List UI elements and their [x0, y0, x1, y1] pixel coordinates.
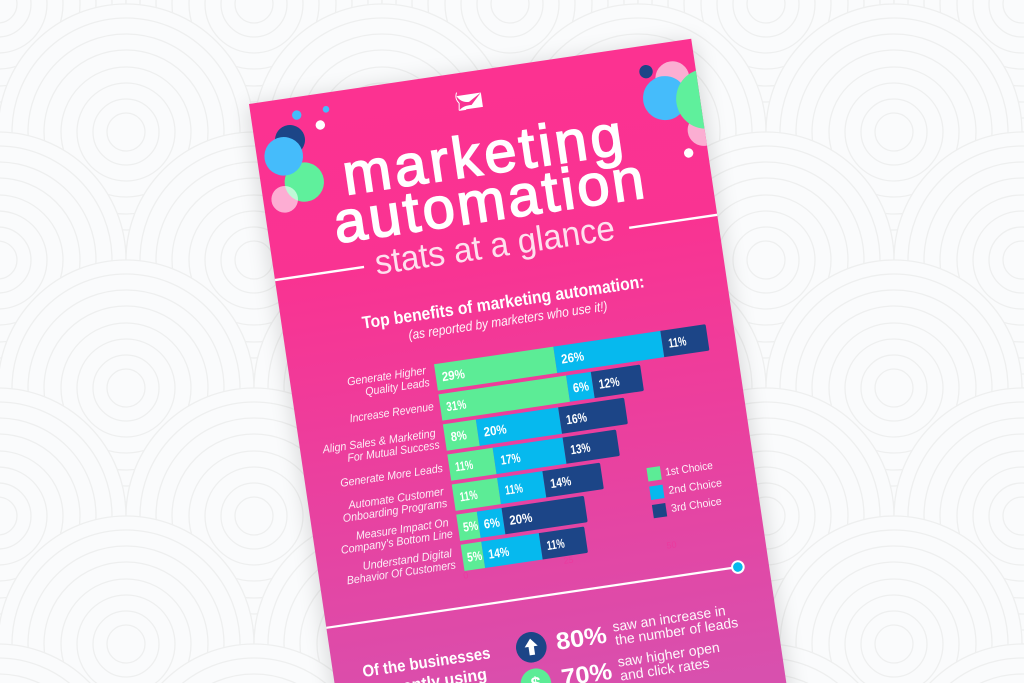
- bar: Generate Higher Quality Leads: 11%: [667, 333, 688, 351]
- section divider with dot: [326, 560, 744, 634]
- bar: Measure Impact: 6%: [483, 514, 501, 532]
- bar: Automate Customer Onboarding: 14%: [549, 473, 573, 491]
- icon: up arrow: [514, 630, 549, 665]
- card background: [249, 39, 823, 683]
- stat: 80 percent leads: saw an increase in: [611, 602, 727, 635]
- bar: Understand Digital Behavior: 11%: [546, 536, 566, 553]
- bar: Generate Higher Quality Leads: 26%: [560, 348, 585, 367]
- stat: 70 percent open rates: saw higher open: [616, 639, 721, 670]
- chart legend: 1st Choice: [664, 460, 714, 479]
- chart category labels: [312, 365, 458, 588]
- bar: Increase Revenue: 31%: [445, 396, 468, 414]
- chart legend: 3rd Choice: [670, 496, 723, 515]
- text: of the businesses currently using: Of the businesses: [361, 644, 492, 681]
- chart category labels: Generate Higher: [346, 365, 428, 389]
- stat: 80 percent leads: [514, 601, 739, 665]
- bar: Automate Customer Onboarding: 11%: [504, 480, 524, 498]
- chart subheading: (as reported by marketers who use it!): [407, 298, 608, 343]
- chart category labels: Automate Customer: [347, 486, 446, 512]
- chart category labels: Generate More Leads: [340, 463, 444, 490]
- bar: Generate Higher Quality Leads: 29%: [441, 366, 466, 384]
- stat: 70 percent open rates: and click rates: [619, 655, 710, 683]
- stat: 80 percent leads: 80%: [554, 622, 609, 656]
- bar: Understand Digital Behavior: [461, 526, 588, 571]
- subtitle rule: right: [629, 215, 717, 228]
- chart category labels: Quality Leads: [365, 377, 431, 398]
- bar: Align Sales and Marketing: 16%: [565, 409, 588, 427]
- chart legend: [646, 458, 726, 518]
- chart category labels: Measure Impact On: [355, 517, 449, 543]
- bar: Align Sales and Marketing: 20%: [483, 421, 508, 439]
- subtitle: stats at a glance: [372, 209, 617, 283]
- bar: Automate Customer Onboarding: [452, 463, 604, 511]
- icon: logo envelope: [455, 89, 483, 111]
- chart category labels: For Mutual Success: [347, 439, 441, 465]
- bar: Measure Impact: [456, 496, 588, 541]
- bar: Generate More Leads: [447, 430, 620, 481]
- bar: Understand Digital Behavior: 5%: [466, 548, 483, 565]
- title: marketing: [338, 102, 627, 208]
- title: automation: [329, 146, 648, 256]
- bar: Generate More Leads: 13%: [569, 440, 592, 457]
- stat: 70 percent open rates: [518, 639, 723, 683]
- decorative bubbles: top right: [639, 61, 707, 158]
- card shadow: [247, 40, 825, 683]
- stat: 80 percent leads: the number of leads: [614, 614, 739, 648]
- chart category labels: Behavior Of Customers: [346, 559, 457, 587]
- faint chart axis ticks: 50: [666, 539, 677, 551]
- bar: Understand Digital Behavior: 14%: [487, 544, 511, 562]
- chart category labels: Increase Revenue: [349, 401, 435, 425]
- stacked bar chart: [434, 324, 736, 571]
- icon: dollar sign: [519, 666, 553, 683]
- decorative bubbles: top left: [258, 106, 343, 215]
- bar: Align Sales and Marketing: 8%: [450, 427, 468, 444]
- infographic card: [247, 33, 859, 683]
- chart category labels: Align Sales & Marketing: [321, 428, 437, 456]
- chart category labels: Company's Bottom Line: [340, 528, 454, 557]
- chart category labels: Onboarding Programs: [342, 498, 448, 525]
- bar: Increase Revenue: 6%: [572, 378, 590, 396]
- bar: Align Sales and Marketing: [443, 398, 628, 451]
- bar: Generate Higher Quality Leads: [434, 324, 709, 391]
- bar: Automate Customer Onboarding: 11%: [459, 487, 479, 504]
- bar: Increase Revenue: [438, 365, 644, 421]
- chart category labels: Understand Digital: [362, 548, 453, 573]
- faint chart axis ticks: [463, 539, 677, 581]
- bar: Generate More Leads: 17%: [499, 450, 522, 468]
- chart legend: 2nd Choice: [668, 477, 723, 497]
- faint chart axis ticks: 25: [563, 555, 574, 566]
- faint chart axis ticks: 0: [463, 570, 469, 581]
- bar: Increase Revenue: 12%: [598, 374, 621, 392]
- title: [322, 100, 648, 256]
- subtitle rule: left: [275, 267, 364, 280]
- bar: Measure Impact: 5%: [462, 518, 479, 535]
- chart heading: Top benefits of marketing automation:: [361, 271, 646, 333]
- bar: Generate More Leads: 11%: [454, 457, 474, 474]
- bar: Measure Impact: 20%: [508, 510, 534, 528]
